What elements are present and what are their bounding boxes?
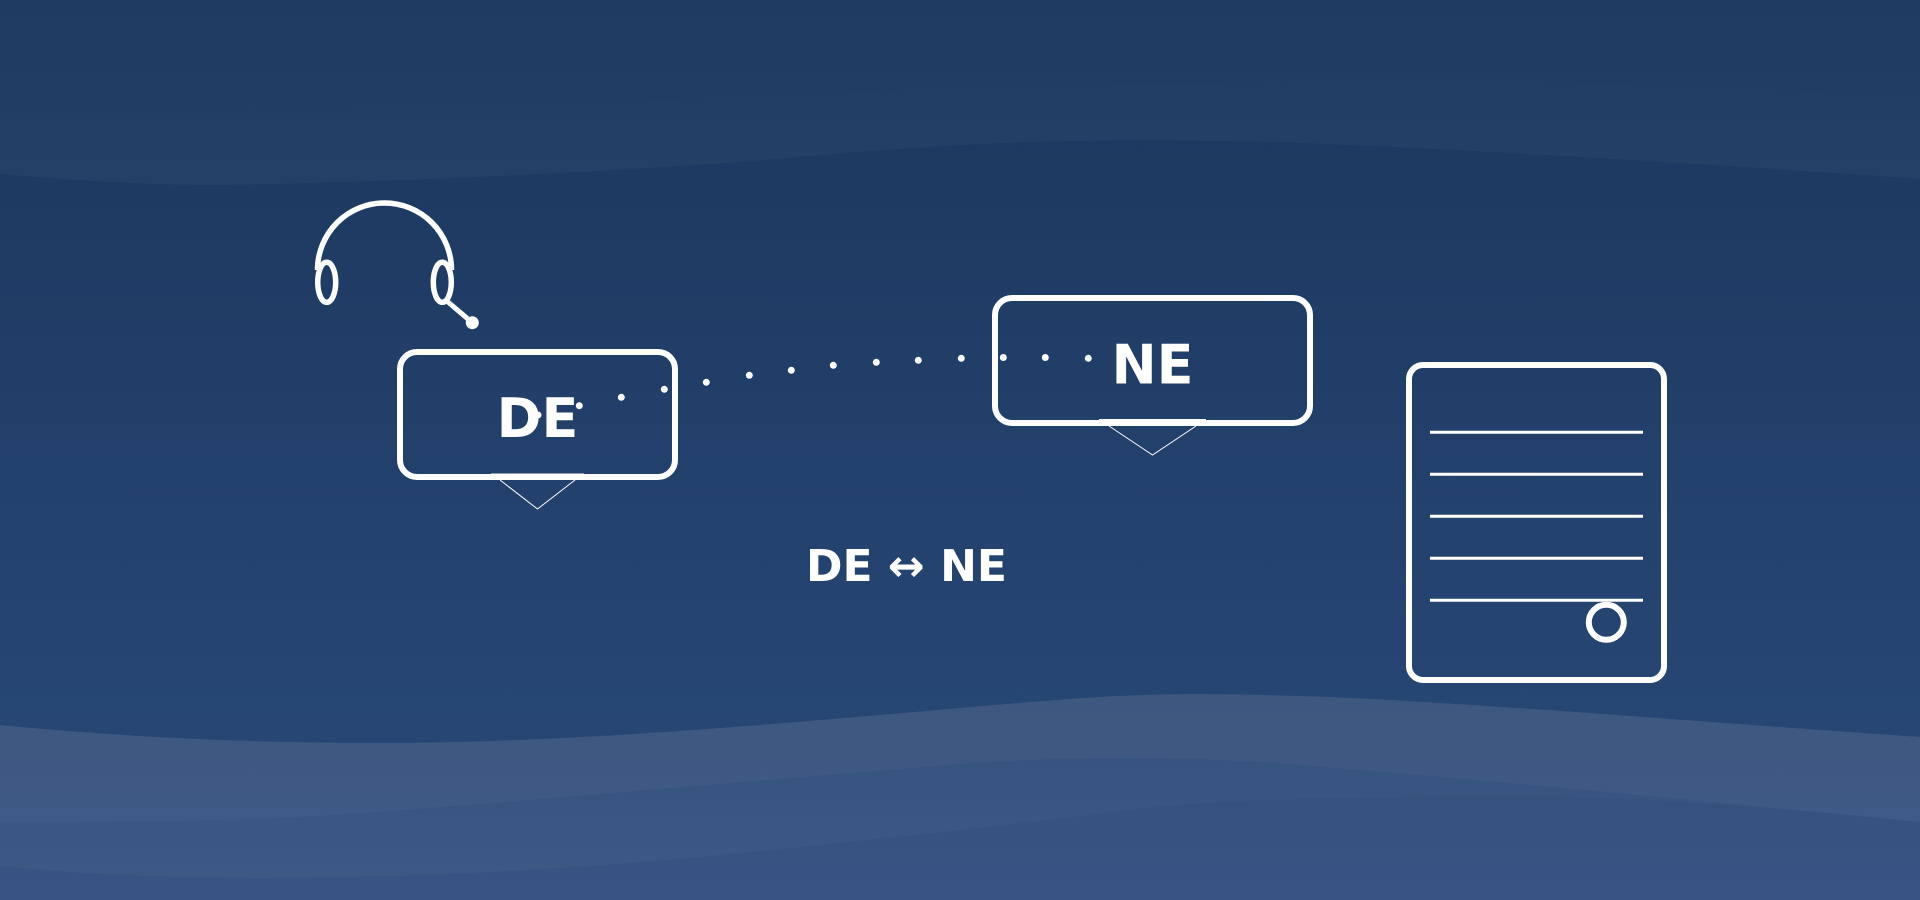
label: DE: DE [497,387,578,450]
icon: document with seal [1409,365,1664,680]
dotted connection between DE and NE [534,354,1092,418]
top waves [0,0,1920,185]
icon: headset [318,203,479,329]
speech bubble: NE [995,298,1310,455]
label: NE: NE [1111,334,1194,396]
bottom waves [0,694,1920,900]
caption: DE to NE: DE ↔ NE [806,541,1007,592]
speech bubble: DE [400,352,675,509]
